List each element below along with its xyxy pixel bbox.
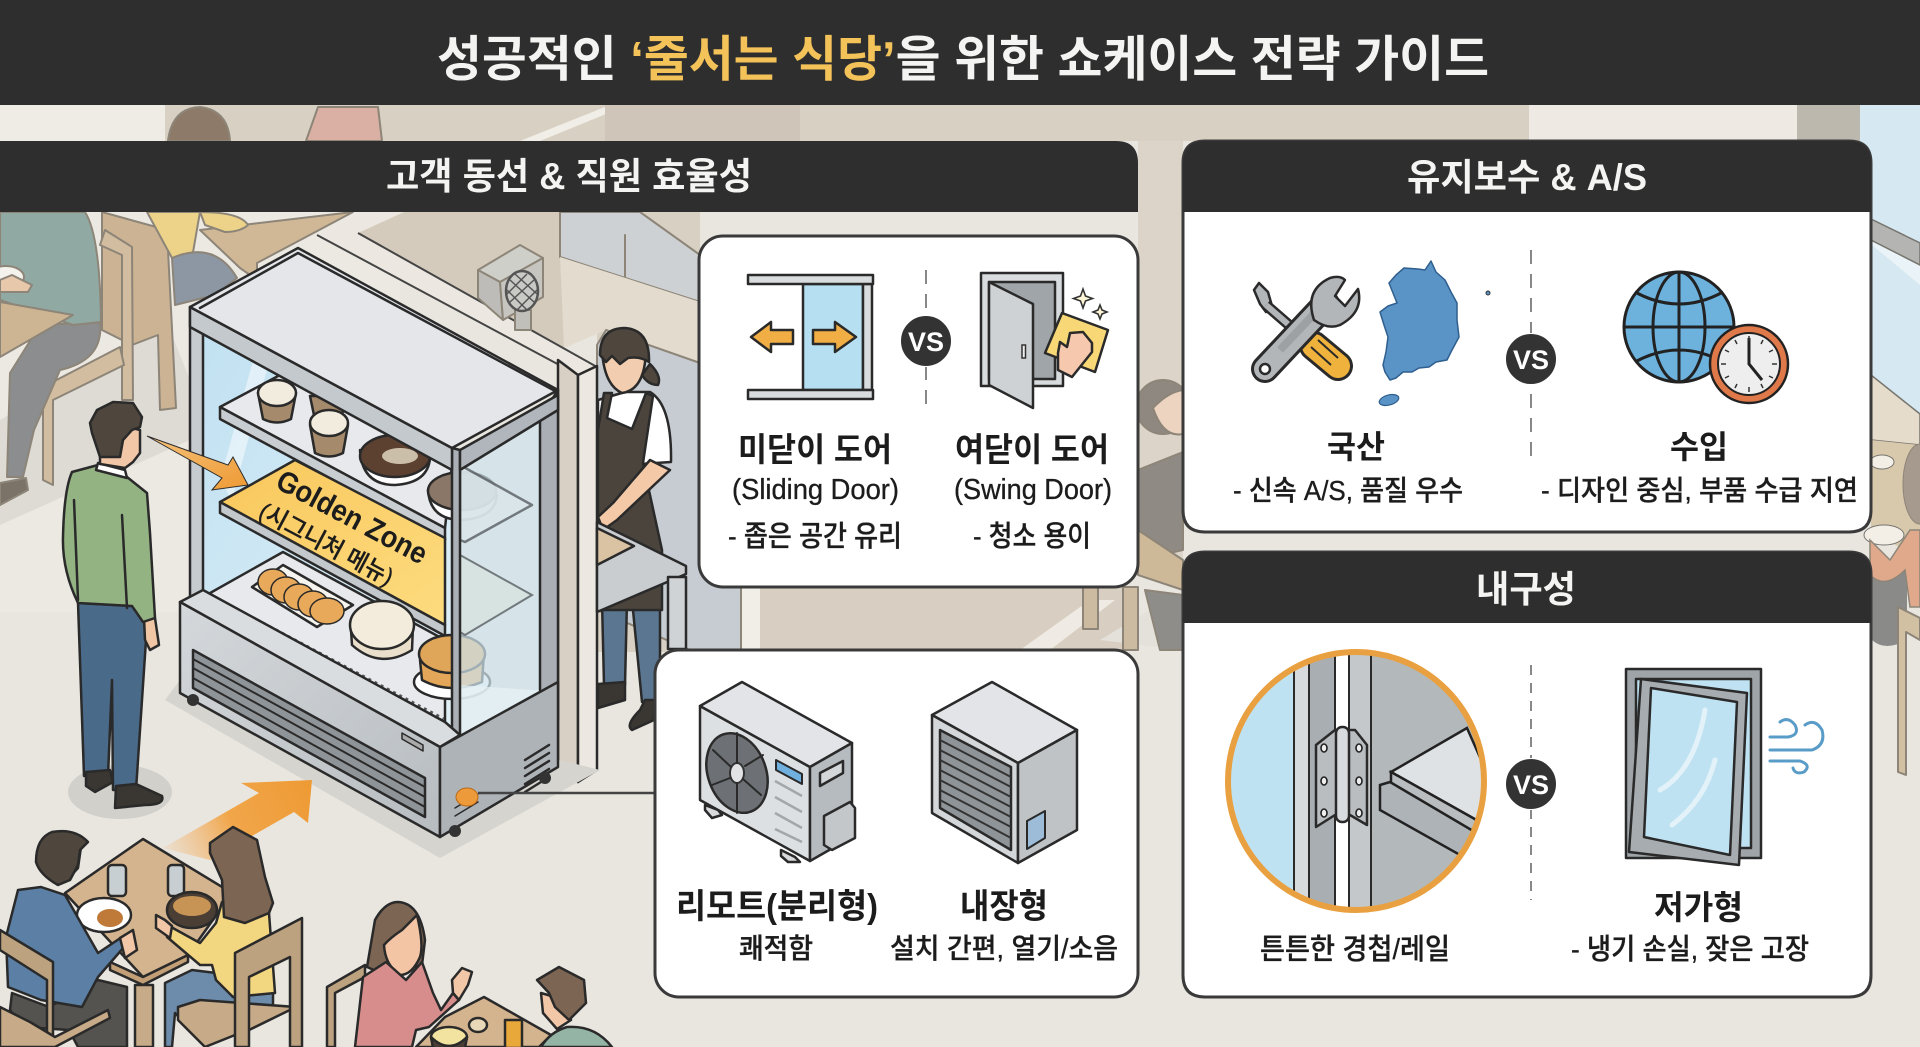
icon: swing door xyxy=(981,273,1108,408)
icon: tools xyxy=(1254,277,1359,374)
dim diner between panels xyxy=(1083,380,1190,650)
swing door label: - 청소 용이 xyxy=(973,520,1091,553)
low-cost label xyxy=(1571,889,1809,966)
remote label xyxy=(676,888,878,964)
man head xyxy=(36,831,88,885)
divider xyxy=(1530,250,1532,460)
top panel xyxy=(190,248,558,448)
import label: - 디자인 중심, 부품 수급 지연 xyxy=(1541,475,1858,506)
swing door label: 여닫이 도어 xyxy=(955,431,1109,468)
golden zone label: (시그니처 메뉴) xyxy=(254,498,398,591)
sliding door label xyxy=(728,431,902,553)
customer standing xyxy=(63,402,172,819)
steamer xyxy=(350,601,414,659)
man hand xyxy=(120,930,137,958)
wrench xyxy=(1260,277,1359,374)
import label: 수입 xyxy=(1670,429,1728,465)
dumpling tray xyxy=(252,565,353,627)
woman in yellow xyxy=(167,902,275,997)
table xyxy=(65,839,232,1047)
worker apron xyxy=(598,393,662,610)
icon: warped window xyxy=(1626,669,1761,865)
cloth and hand xyxy=(1045,313,1108,377)
far table and yellow diner xyxy=(200,212,353,280)
swing door label: (Swing Door) xyxy=(954,474,1112,506)
sliding door label: - 좁은 공간 유리 xyxy=(728,520,902,553)
work table xyxy=(597,522,686,649)
wall pillar xyxy=(558,360,597,782)
noodle bowls xyxy=(360,435,497,520)
divider xyxy=(925,270,927,412)
sparkles xyxy=(1074,289,1107,319)
swing door label xyxy=(954,431,1112,553)
floor shadow xyxy=(68,765,172,819)
woman hand xyxy=(156,915,172,938)
worker behind showcase xyxy=(597,328,686,730)
vs badge: VS xyxy=(1513,770,1549,800)
built-in label xyxy=(890,888,1118,964)
vs badge: VS xyxy=(1513,345,1549,375)
head xyxy=(90,402,142,478)
base cabinet xyxy=(180,590,558,837)
icon: remote condenser xyxy=(696,682,855,862)
durability heading: 내구성 xyxy=(1476,569,1576,610)
side vent xyxy=(525,745,549,792)
title bar xyxy=(0,0,1920,105)
dim diner in top strip xyxy=(168,107,382,141)
nameplate xyxy=(402,733,423,751)
front vent xyxy=(193,650,425,817)
diners table left xyxy=(0,827,302,1047)
title text: 성공적인 ‘줄서는 식당’을 위한 쇼케이스 전략 가이드 xyxy=(437,33,1489,87)
casters xyxy=(187,694,551,837)
lower display floor and food xyxy=(203,552,490,722)
woman in pink xyxy=(355,902,472,1047)
sliding door label: (Sliding Door) xyxy=(732,474,899,506)
built-in label: 내장형 xyxy=(960,888,1048,926)
man in green xyxy=(537,967,612,1047)
legs xyxy=(78,603,162,808)
teal diner torso xyxy=(0,212,101,325)
domestic label: - 신속 A/S, 품질 우수 xyxy=(1233,475,1463,506)
compressor fan marker xyxy=(455,788,478,816)
vs badge xyxy=(1506,758,1556,810)
golden zone shelf xyxy=(220,460,445,636)
hand xyxy=(144,618,159,650)
flow arrow to showcase xyxy=(163,780,312,860)
icon: globe and clock xyxy=(1624,272,1788,403)
panel: durability xyxy=(1183,552,1871,997)
icon: wind xyxy=(1770,720,1823,773)
green sweater xyxy=(63,465,155,622)
chair xyxy=(327,965,365,1047)
heading: customer flow xyxy=(0,141,1138,212)
panel: maintenance xyxy=(1183,141,1871,532)
woman hair xyxy=(210,827,273,923)
golden zone label: Golden Zone xyxy=(271,464,433,571)
right side glass xyxy=(460,420,540,735)
teal diner pants xyxy=(7,322,100,477)
icon: hinge closeup xyxy=(1220,650,1491,920)
domestic label: 국산 xyxy=(1327,429,1385,465)
low-cost label: 저가형 xyxy=(1654,889,1743,926)
worker head xyxy=(600,328,659,393)
connector line to compressor panel xyxy=(478,792,656,794)
hinge label: 튼튼한 경첩/레일 xyxy=(1260,933,1450,966)
icon: sliding door xyxy=(748,275,873,399)
showcase refrigerator xyxy=(165,248,656,858)
import label xyxy=(1541,429,1858,506)
screwdriver xyxy=(1254,283,1338,366)
glass back panel xyxy=(190,307,452,740)
man pants xyxy=(10,980,127,1047)
man in blue torso xyxy=(6,887,124,1007)
panel: door type xyxy=(699,236,1138,587)
worker legs xyxy=(598,600,660,730)
remote label: 리모트(분리형) xyxy=(676,888,878,926)
icon: built-in compressor xyxy=(932,682,1077,863)
worker shirt xyxy=(598,392,671,464)
maintenance heading: 유지보수 & A/S xyxy=(1407,157,1647,198)
dim diners top left xyxy=(0,212,353,505)
panel: compressor type xyxy=(655,650,1138,997)
remote label: 쾌적함 xyxy=(739,933,813,964)
domestic label xyxy=(1233,429,1463,506)
near chair xyxy=(100,230,133,400)
floor shadow xyxy=(165,680,600,858)
table items xyxy=(431,1018,522,1047)
vs badge xyxy=(900,316,952,366)
upper shelf xyxy=(220,375,497,540)
vs badge: VS xyxy=(908,327,944,357)
table xyxy=(416,997,551,1047)
built-in label: 설치 간편, 열기/소음 xyxy=(890,933,1118,964)
worker arm xyxy=(598,460,670,530)
woman pants xyxy=(165,970,273,1047)
diners table right xyxy=(327,902,612,1047)
dim table and plate xyxy=(0,302,73,357)
wooden chair left xyxy=(0,930,110,1047)
frame pillars xyxy=(190,307,558,740)
cups xyxy=(258,380,348,456)
back chair xyxy=(102,212,176,410)
icon: korea map xyxy=(1378,261,1490,407)
window and right edge diner xyxy=(1860,105,1920,775)
rear vent unit xyxy=(478,245,543,330)
heading: customer flow: 고객 동선 & 직원 효율성 xyxy=(386,156,752,197)
wooden chair right xyxy=(178,918,302,1047)
low-cost label: - 냉기 손실, 잦은 고장 xyxy=(1571,934,1809,966)
kitchen wall and cabinets xyxy=(317,212,741,650)
vs badge xyxy=(1506,334,1556,384)
divider xyxy=(1530,665,1532,900)
gaze arrow xyxy=(147,436,248,490)
stacked pancakes xyxy=(414,635,490,699)
sliding door label: 미닫이 도어 xyxy=(738,431,892,468)
